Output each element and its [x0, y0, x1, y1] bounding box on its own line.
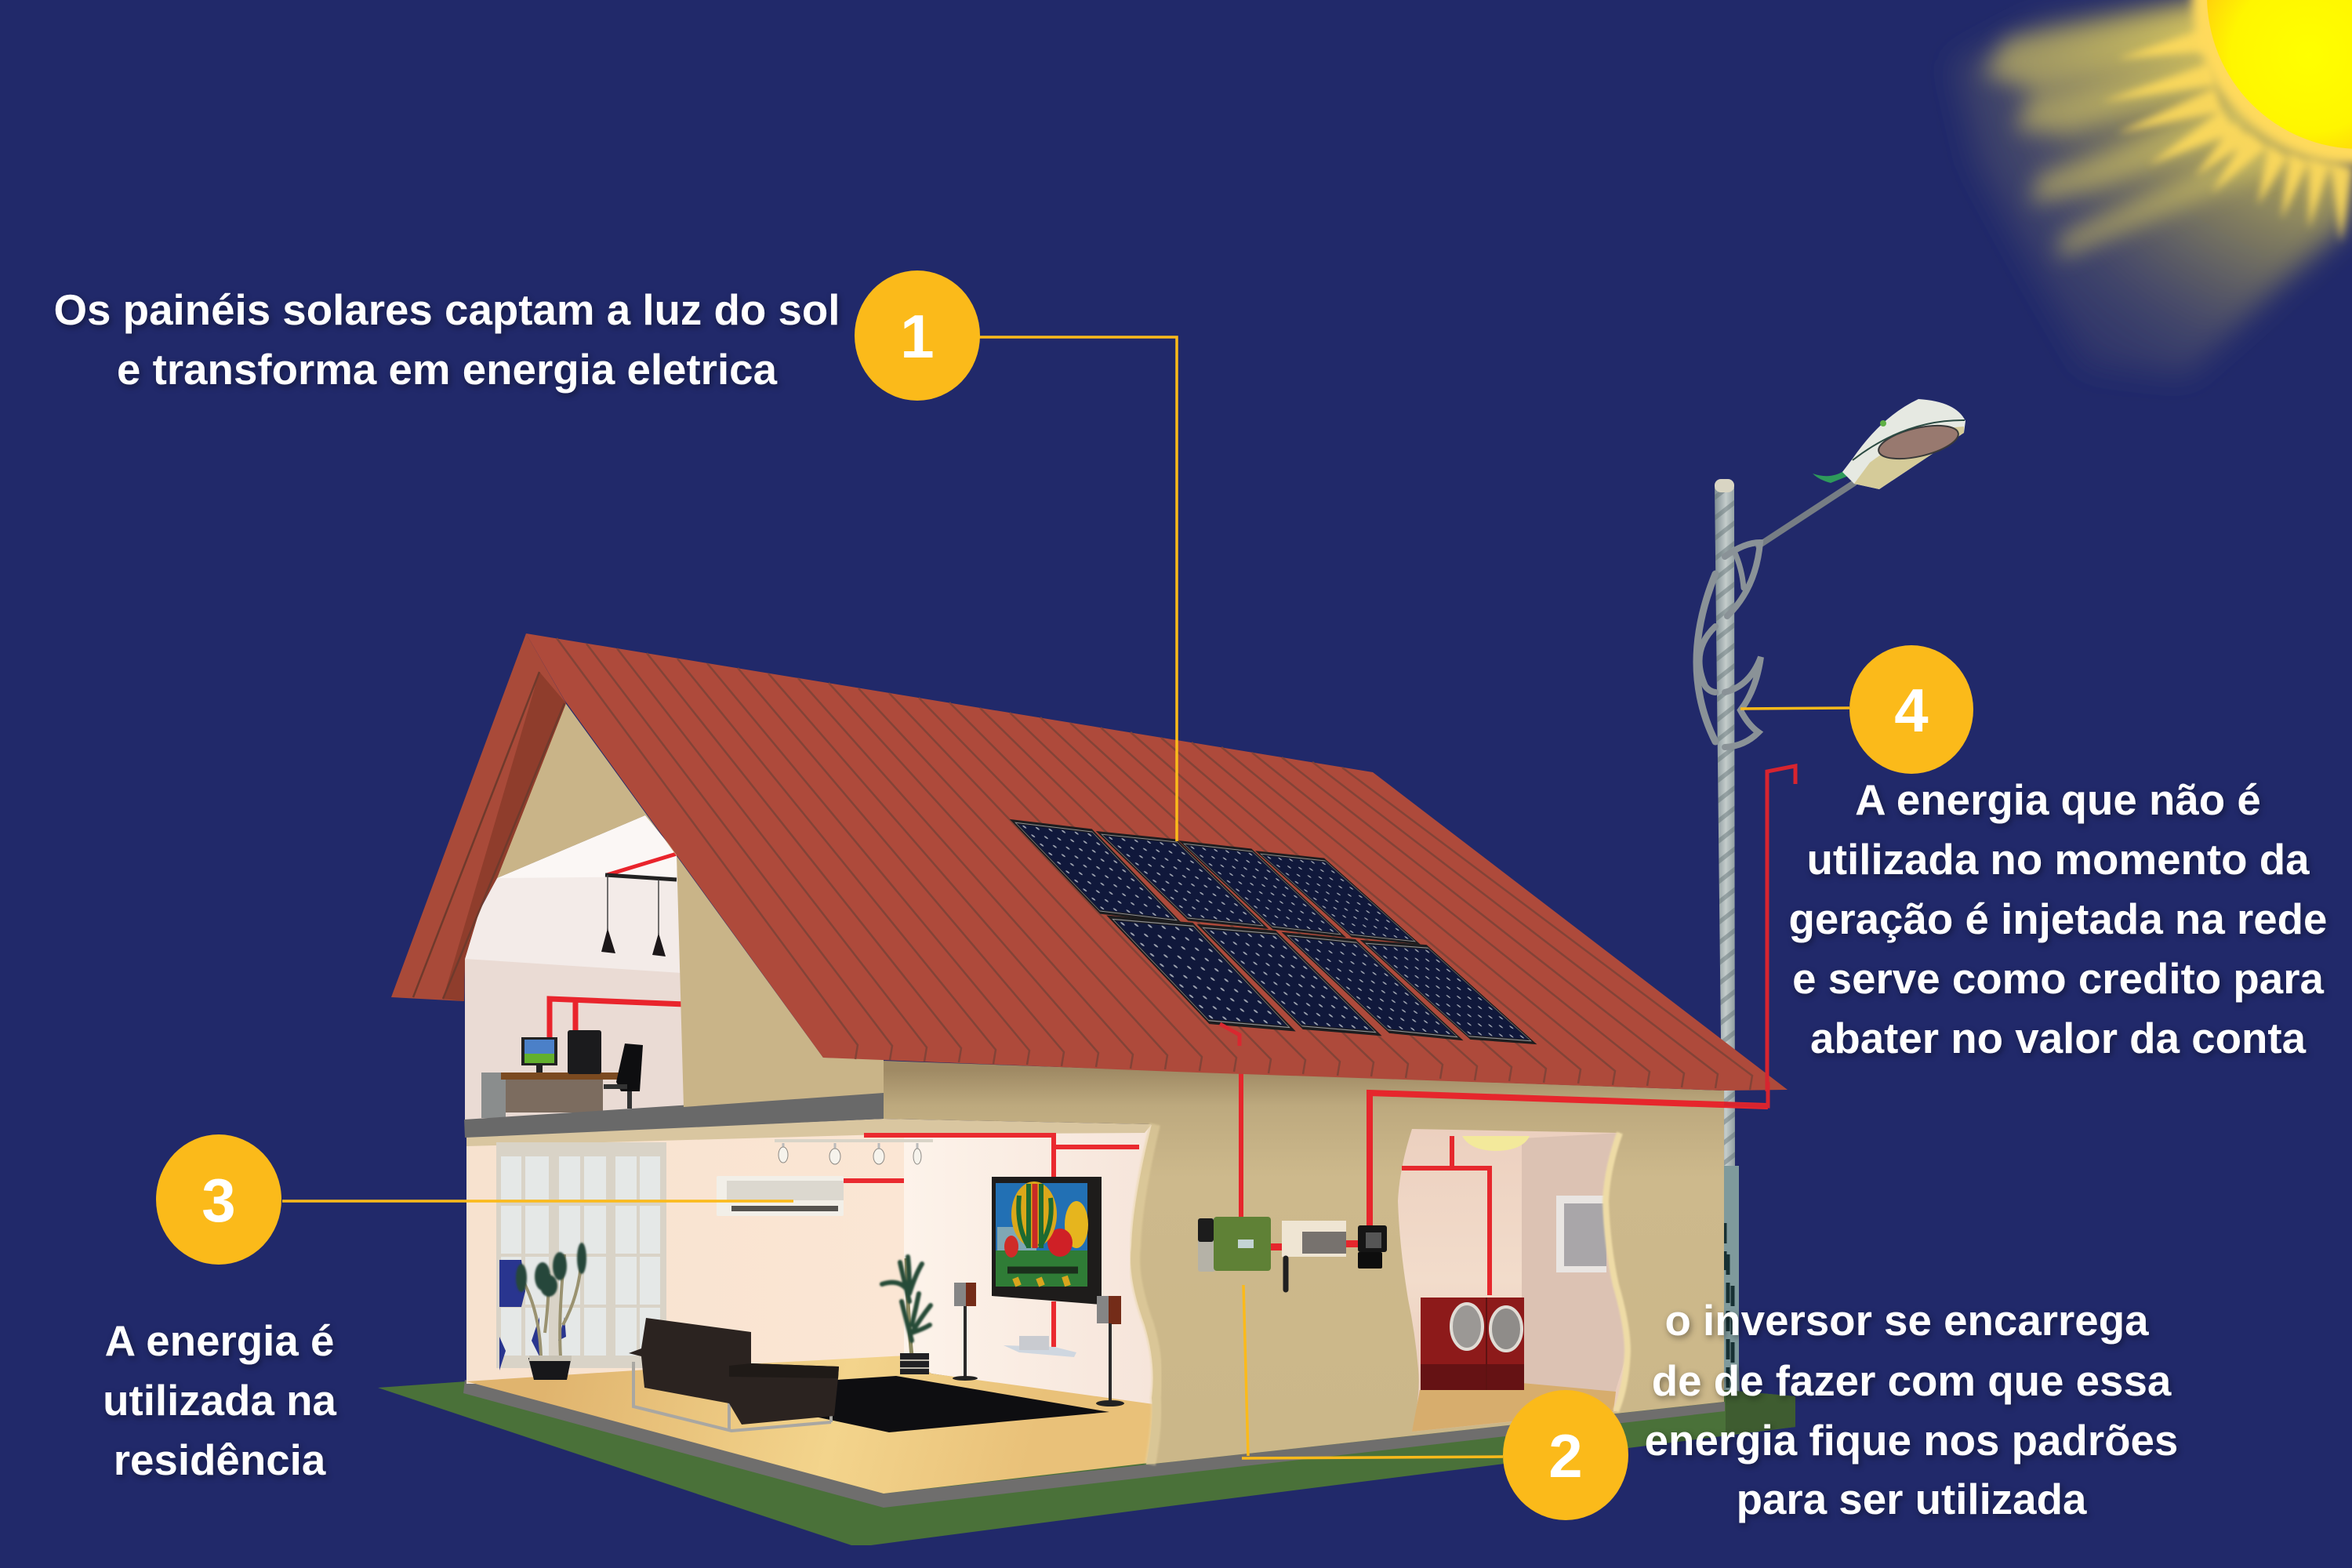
front wall with cutaways	[884, 1061, 1724, 1465]
main roof	[526, 633, 1788, 1091]
wire past the roof tip	[1724, 1082, 1768, 1106]
inverter	[1198, 1217, 1283, 1272]
number badge 3: 3	[201, 1166, 236, 1235]
living room	[464, 1092, 1184, 1494]
street lamp	[1697, 399, 1965, 1403]
panel 2	[1100, 833, 1265, 927]
text: step 3	[103, 1316, 336, 1484]
text: step 2: de de fazer com que essa	[1652, 1356, 2172, 1405]
leader line 1	[979, 337, 1177, 841]
house foundation	[463, 1380, 1725, 1508]
text: step 2: energia fique nos padrões	[1645, 1416, 2178, 1465]
number badge 2	[1503, 1390, 1628, 1520]
house	[391, 633, 1788, 1508]
air conditioner	[717, 1176, 844, 1216]
floor plant	[882, 1257, 931, 1374]
text: step 3: utilizada na	[103, 1376, 336, 1425]
panel 1	[1014, 822, 1178, 921]
text: step 3: A energia é	[105, 1316, 334, 1365]
text: step 3: residência	[114, 1436, 326, 1484]
gable wall	[497, 702, 884, 1107]
breaker box	[1282, 1221, 1358, 1290]
text: step 4: geração é injetada na rede	[1789, 895, 2327, 943]
wall pipe	[550, 999, 685, 1037]
side wall	[904, 1124, 1184, 1411]
text: step 1	[54, 285, 840, 394]
text: step 1: Os painéis solares captam a luz do sol	[54, 285, 840, 334]
number badge 4: 4	[1894, 676, 1929, 745]
lamp pole	[1715, 479, 1740, 1403]
washing machines	[1421, 1298, 1524, 1390]
text: step 2: o inversor se encarrega	[1664, 1296, 2149, 1345]
ceiling pipe and rail	[605, 854, 677, 880]
panel 6	[1201, 927, 1377, 1033]
number badge 2: 2	[1548, 1421, 1583, 1490]
text: step 2: para ser utilizada	[1737, 1475, 2087, 1523]
roof tile lines	[557, 638, 1752, 1090]
pendant lamps	[601, 875, 666, 956]
sofa	[629, 1318, 839, 1431]
left roof fascia	[391, 633, 566, 1001]
cut edge of laundry	[1606, 1133, 1628, 1411]
grid connection wire	[1767, 766, 1795, 1106]
ceiling	[466, 1119, 1152, 1146]
text: step 4: utilizada no momento da	[1806, 835, 2310, 884]
panel 4	[1259, 853, 1417, 942]
electric meter	[1358, 1225, 1387, 1269]
plant by the window	[516, 1243, 586, 1380]
number badge 4	[1849, 645, 1973, 774]
roof wire stub	[1220, 1024, 1240, 1046]
upper floor slab	[464, 1092, 884, 1138]
shelf with stereo	[1004, 1336, 1076, 1357]
laundry room	[1398, 1129, 1628, 1432]
ground: lawn shaded corner	[1726, 1390, 1795, 1435]
lamp arm and brackets	[1697, 483, 1854, 747]
panel 7	[1286, 935, 1459, 1038]
television	[992, 1177, 1102, 1305]
upper room	[465, 815, 685, 1121]
laundry window	[1556, 1196, 1606, 1272]
text: step 1: e transforma em energia eletrica	[117, 345, 778, 394]
leader line 2	[1242, 1285, 1503, 1458]
ceiling light	[1462, 1136, 1530, 1151]
ground: lawn	[378, 1381, 1795, 1545]
speakers	[953, 1283, 1124, 1406]
panel 5	[1111, 918, 1291, 1029]
window	[496, 1142, 666, 1370]
text: step 2	[1645, 1296, 2178, 1523]
panel 8	[1364, 942, 1533, 1042]
cut wall edge highlight	[1134, 1124, 1157, 1465]
icon: sun with rays	[1952, 0, 2352, 376]
number badge 1: 1	[900, 302, 935, 371]
lamp head	[1813, 399, 1965, 489]
number badge 3	[156, 1134, 281, 1265]
solar panels	[1014, 822, 1533, 1042]
leader line 3	[282, 1200, 793, 1203]
solar wiring on the wall	[1241, 1072, 1768, 1225]
number badge 1	[855, 270, 980, 401]
leader line 4	[1740, 708, 1849, 709]
rug	[797, 1376, 1109, 1432]
red pipes	[844, 1135, 1139, 1347]
panel 3	[1182, 843, 1342, 935]
back wall	[466, 1133, 906, 1384]
text: step 4: abater no valor da conta	[1810, 1014, 2307, 1062]
text: step 4: A energia que não é	[1855, 775, 2261, 824]
text: step 4: e serve como credito para	[1792, 954, 2324, 1003]
laundry pipe	[1402, 1136, 1490, 1295]
floor	[466, 1356, 1176, 1494]
track lights	[775, 1141, 933, 1164]
text: step 4	[1789, 775, 2327, 1062]
desk with computer	[481, 1030, 643, 1118]
